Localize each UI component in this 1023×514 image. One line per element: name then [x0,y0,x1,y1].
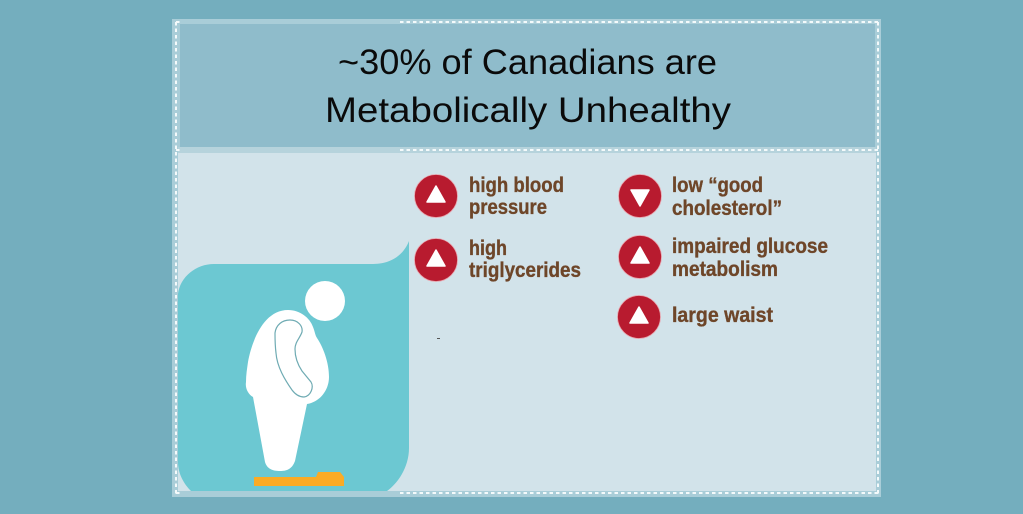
item: large waist [618,296,773,338]
item: low good cholesterol [618,174,782,220]
title [325,43,732,130]
item: impaired glucose metabolism: metabolism [672,258,778,281]
item: high blood pressure [414,174,564,219]
item: high blood pressure: pressure [469,196,547,219]
head [305,281,345,321]
speech bubble panel [178,241,409,491]
title: ~30% of Canadians are [338,43,717,82]
item: high triglycerides [414,237,581,282]
item: low good cholesterol: cholesterol” [672,197,782,220]
icon: person on scale [246,281,345,486]
item: impaired glucose metabolism: impaired glucose [672,235,828,258]
title: Metabolically Unhealthy [325,91,732,130]
item: large waist: large waist [672,304,773,327]
panel: header band [180,24,875,147]
item: high blood pressure: high blood [469,174,564,197]
item: high triglycerides: high [469,237,507,260]
scale [254,472,344,486]
body [246,310,329,471]
item: high triglycerides: triglycerides [469,259,581,282]
panel: card [172,19,881,497]
arm outline [275,320,312,397]
item: impaired glucose metabolism [618,235,828,281]
item: low good cholesterol: low “good [672,174,763,197]
stray mark [437,338,440,339]
